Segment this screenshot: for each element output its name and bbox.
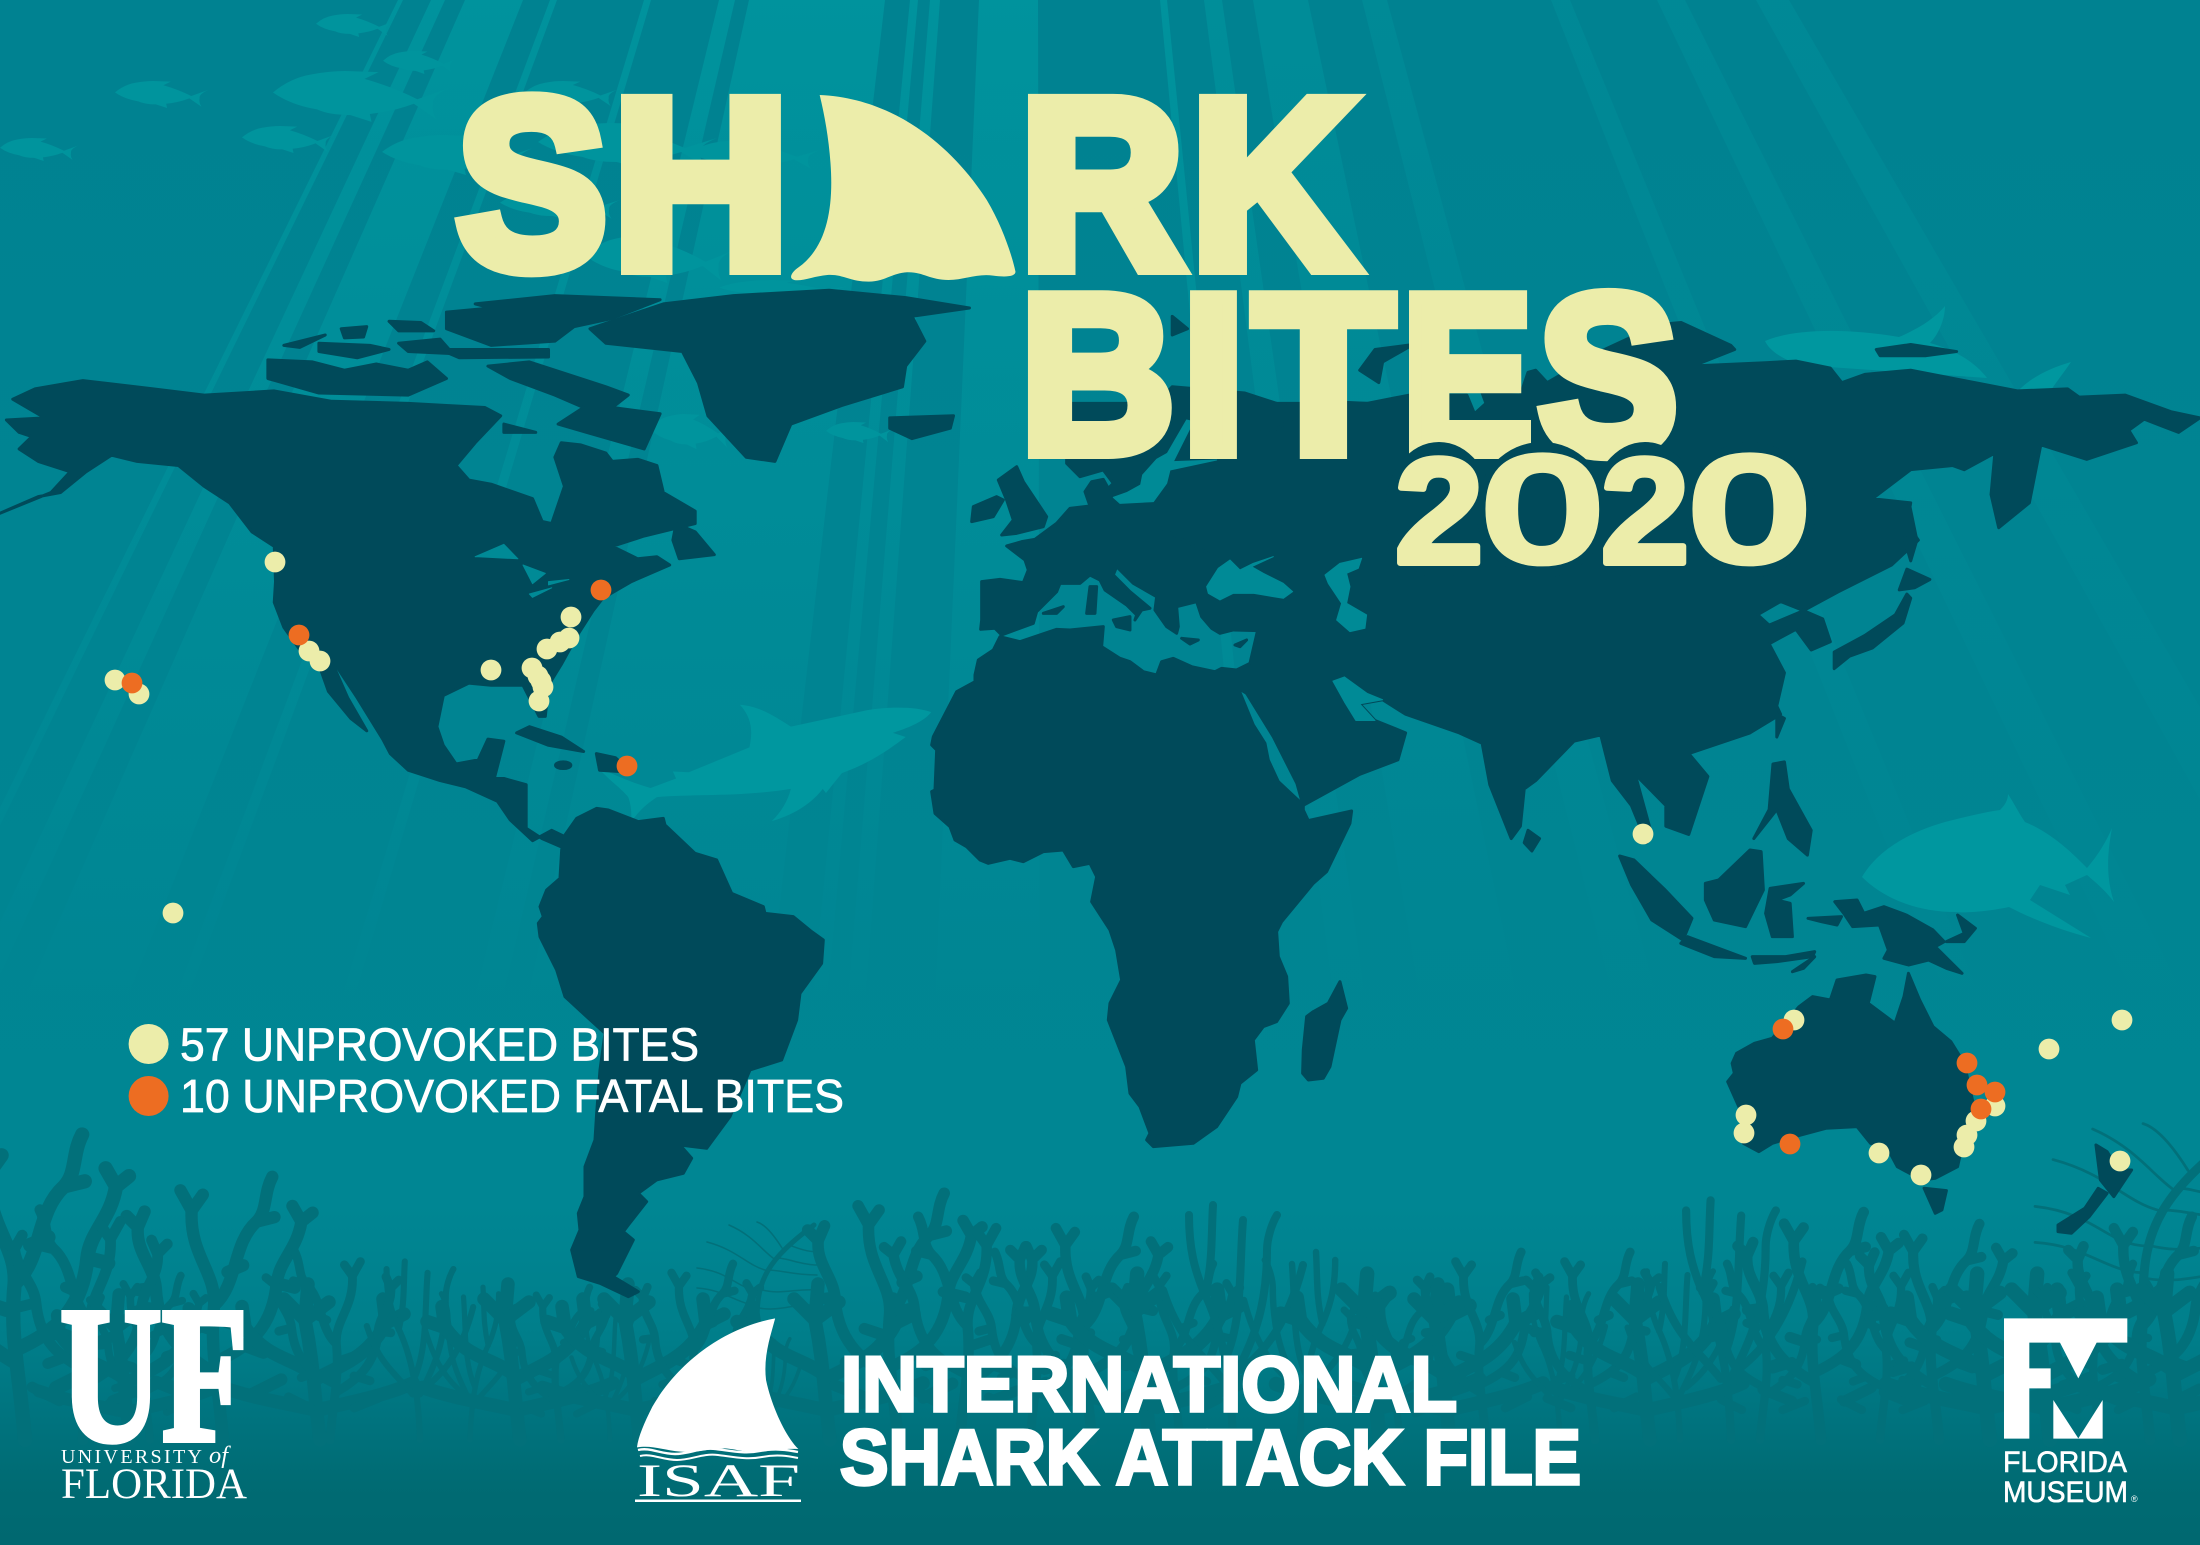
- school of fish: [0, 14, 893, 449]
- title: BITES: E: [1402, 248, 1533, 500]
- title: 2020 with dark halo: 0: [1484, 428, 1600, 592]
- map: Europe and western Asia: [972, 403, 1400, 663]
- map markers: unprovoked bites: [105, 552, 2132, 1185]
- logo: University of Florida: UNIVERSITY: [61, 1446, 202, 1468]
- logo: Florida Museum: MUSEUM: [2003, 1476, 2128, 1509]
- title: BITES: B: [1020, 248, 1175, 500]
- title: SHARK with fin as the letter A: R: [1020, 51, 1183, 319]
- title: BITES: S: [1538, 249, 1678, 501]
- title: SHARK with fin as the letter A: K: [1191, 49, 1356, 318]
- heading: International Shark Attack File: INTERNATIONAL: [841, 1340, 1457, 1428]
- map: Africa and Madagascar: [932, 627, 1352, 1147]
- shark: centre Atlantic: [596, 705, 931, 822]
- title: BITES: T: [1253, 249, 1393, 501]
- title: BITES: I: [1182, 248, 1245, 500]
- map: Southeast Asia and Oceania: [1620, 850, 2132, 1233]
- background: light rays: [0, 0, 2200, 1100]
- title: SHARK with fin as the letter A: S: [457, 50, 607, 319]
- heading: International Shark Attack File: [840, 1340, 1581, 1501]
- logo: ISAF fin: ISAF: [637, 1455, 800, 1507]
- logo: Florida Museum: ®: [2131, 1494, 2138, 1504]
- map markers: fatal bites: [122, 580, 2005, 1154]
- shark: right, by New Guinea: [1862, 794, 2114, 938]
- title: SHARK with fin as the letter A: [457, 49, 1356, 319]
- heading: International Shark Attack File: SHARK ATTACK FILE: [840, 1413, 1581, 1501]
- logo: University of Florida: [60, 1267, 248, 1508]
- map: North and Central America, Greenland, Arctic islands: [0, 290, 969, 847]
- world map: [0, 290, 2200, 1297]
- map: South America: [538, 808, 823, 1297]
- legend: 10 UNPROVOKED FATAL BITES: [180, 1070, 844, 1122]
- logo: University of Florida: UF: [60, 1267, 248, 1482]
- shark: upper right, behind Siberia: [1765, 306, 2071, 400]
- logo: ISAF fin: [635, 1318, 801, 1507]
- title: 2020 with dark halo: 0: [1691, 428, 1807, 592]
- legend: 57 UNPROVOKED BITES: [180, 1018, 699, 1070]
- logo: Florida Museum: FLORIDA: [2003, 1446, 2127, 1479]
- title: 2020 with dark halo: 2: [1601, 427, 1689, 595]
- title: SHARK with fin as the letter A: H: [613, 51, 789, 319]
- map: inland seas: [1113, 420, 1383, 720]
- legend: [129, 1018, 844, 1122]
- logo: University of Florida: of: [209, 1443, 231, 1469]
- title: BITES: [1020, 248, 1678, 501]
- title: 2020 with dark halo: 2: [1395, 427, 1483, 595]
- logo: University of Florida: FLORIDA: [61, 1461, 247, 1508]
- icon: shark fin replacing A: [791, 95, 1015, 282]
- map: Asia: [1145, 316, 2200, 855]
- title: 2020 with dark halo: [1385, 427, 1816, 595]
- coral reef silhouette: [0, 1124, 2200, 1440]
- logo: Florida Museum: [2003, 1318, 2138, 1509]
